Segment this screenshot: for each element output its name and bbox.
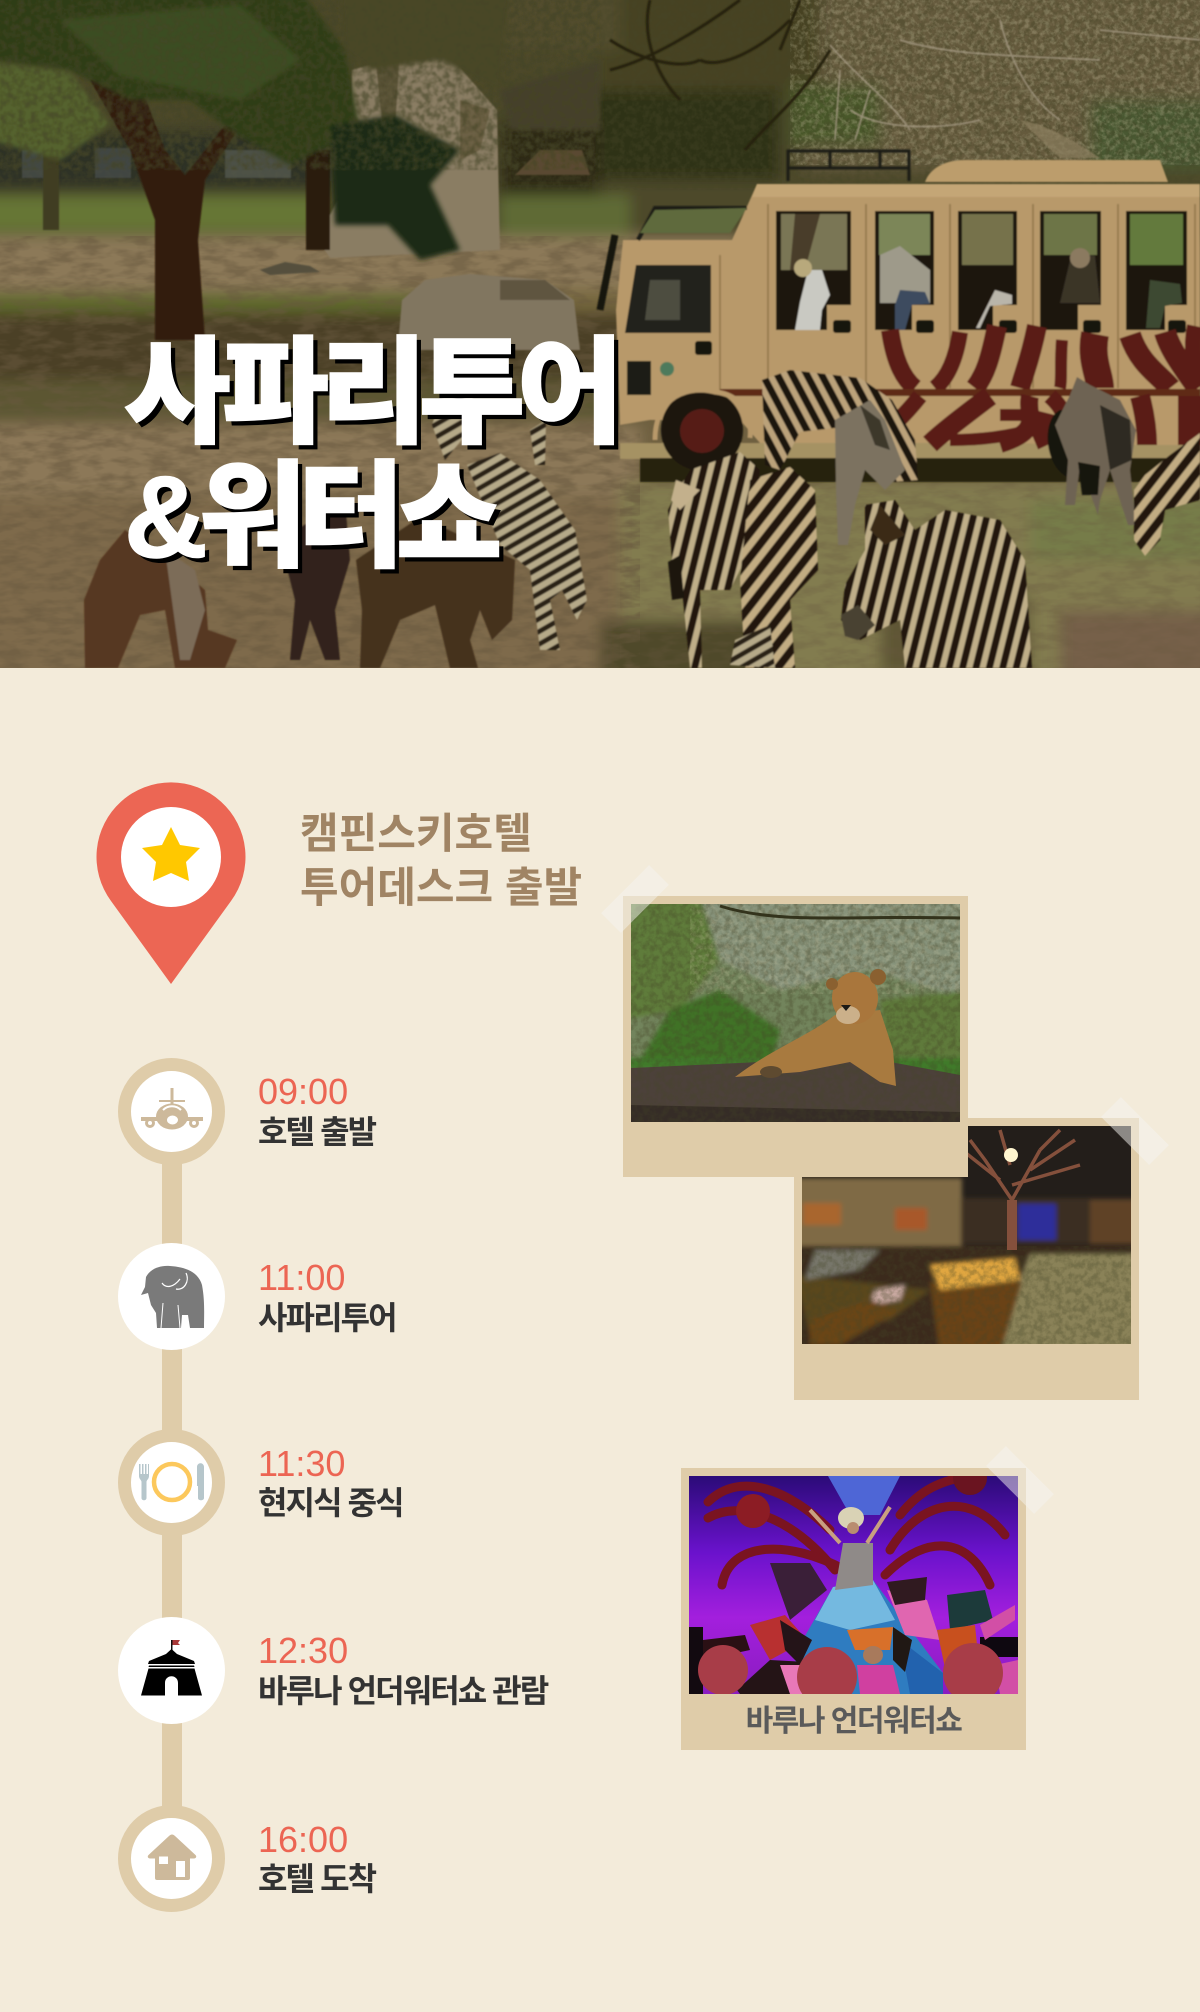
bus wheels xyxy=(661,389,743,471)
baobab trunk xyxy=(318,45,500,258)
bus door handles xyxy=(695,320,1186,355)
middle zebra xyxy=(740,467,818,668)
wildebeest two xyxy=(280,500,350,660)
photo card: buffet restaurant xyxy=(794,1118,1139,1400)
timeline stop: lunch icon xyxy=(118,1429,225,1536)
title xyxy=(124,328,618,582)
grey rhino xyxy=(398,274,580,350)
canopy patches xyxy=(0,0,1200,240)
rocks xyxy=(260,262,320,275)
grazing zebra right xyxy=(1134,433,1200,556)
zebra left behind title xyxy=(432,363,475,460)
start heading xyxy=(300,810,582,911)
timeline text: 11:30: 현지식 중식 xyxy=(258,1485,403,1521)
cab window xyxy=(625,265,711,333)
timeline text: 09:00 xyxy=(258,1071,376,1150)
timeline text: 12:30: 바루나 언더워터쇼 관람 xyxy=(258,1673,547,1709)
timeline text: 11:00: 11:00 xyxy=(258,1257,345,1298)
distant building detail xyxy=(22,150,58,178)
tape on show card xyxy=(986,1446,1054,1514)
timeline stop: hotel departure icon xyxy=(118,1058,225,1165)
photo card: lioness xyxy=(623,896,968,1177)
photo caption: 바루나 언더워터쇼 xyxy=(746,1705,961,1738)
tape on buffet card xyxy=(1101,1097,1169,1165)
left zebra xyxy=(668,452,760,668)
hero photo: safari bus with zebras xyxy=(0,0,1200,668)
timeline text: 11:30 xyxy=(258,1443,403,1521)
branches dark xyxy=(610,0,830,150)
panel lines xyxy=(720,204,1195,440)
timeline text: 11:00: 사파리투어 xyxy=(258,1300,396,1336)
zebra near wildebeests xyxy=(467,453,587,650)
timeline connector line xyxy=(162,1160,182,1810)
wildebeest three xyxy=(356,517,515,668)
bus roof rack xyxy=(788,151,909,181)
small left tree trunk xyxy=(43,145,59,230)
title: &워터쇼 xyxy=(124,452,494,582)
timeline text: 16:00: 16:00 xyxy=(258,1819,348,1860)
railing in front of bus xyxy=(638,208,747,240)
big front zebra xyxy=(841,500,1032,668)
second dark tree trunk xyxy=(306,150,330,250)
foliage layer xyxy=(0,0,600,260)
timeline text: 09:00: 09:00 xyxy=(258,1071,348,1112)
branches light xyxy=(830,20,1200,140)
bus shadow on ground xyxy=(620,443,1200,459)
start heading: 투어데스크 출발 xyxy=(300,864,582,911)
timeline text: 09:00: 호텔 출발 xyxy=(258,1114,375,1150)
timeline text: 16:00: 호텔 도착 xyxy=(258,1861,375,1897)
main left tree trunk xyxy=(90,70,238,340)
timeline stop: underwater show icon xyxy=(118,1617,225,1724)
grass band xyxy=(0,196,320,232)
timeline stop: hotel arrival icon xyxy=(118,1805,225,1912)
bus zebra stripes xyxy=(890,326,1200,388)
title: 사파리투어 xyxy=(124,328,615,458)
distant building xyxy=(0,130,330,190)
photo card: Baruna underwater show xyxy=(681,1468,1026,1750)
front mirror post xyxy=(600,235,615,310)
paths and ground xyxy=(0,236,740,292)
timeline text: 11:30: 11:30 xyxy=(258,1443,345,1484)
thatched hut xyxy=(515,150,590,175)
bus windows xyxy=(776,211,851,330)
grey wildebeest right xyxy=(1055,377,1136,525)
wildebeest middle xyxy=(835,400,905,545)
icon: location pin with star xyxy=(96,782,246,984)
wildebeest one xyxy=(84,530,237,668)
timeline stop: safari tour icon xyxy=(118,1243,225,1350)
timeline text: 11:00 xyxy=(258,1257,396,1336)
back zebra xyxy=(762,370,918,482)
timeline text: 16:00 xyxy=(258,1819,376,1897)
bus roof box xyxy=(925,160,1168,182)
tape on lioness card xyxy=(601,865,669,933)
bus body xyxy=(616,184,1200,445)
cab badge and vent xyxy=(627,361,651,395)
start heading: 캠핀스키호텔 xyxy=(300,810,532,857)
timeline text: 12:30: 12:30 xyxy=(258,1630,348,1671)
timeline text: 12:30 xyxy=(258,1630,548,1709)
